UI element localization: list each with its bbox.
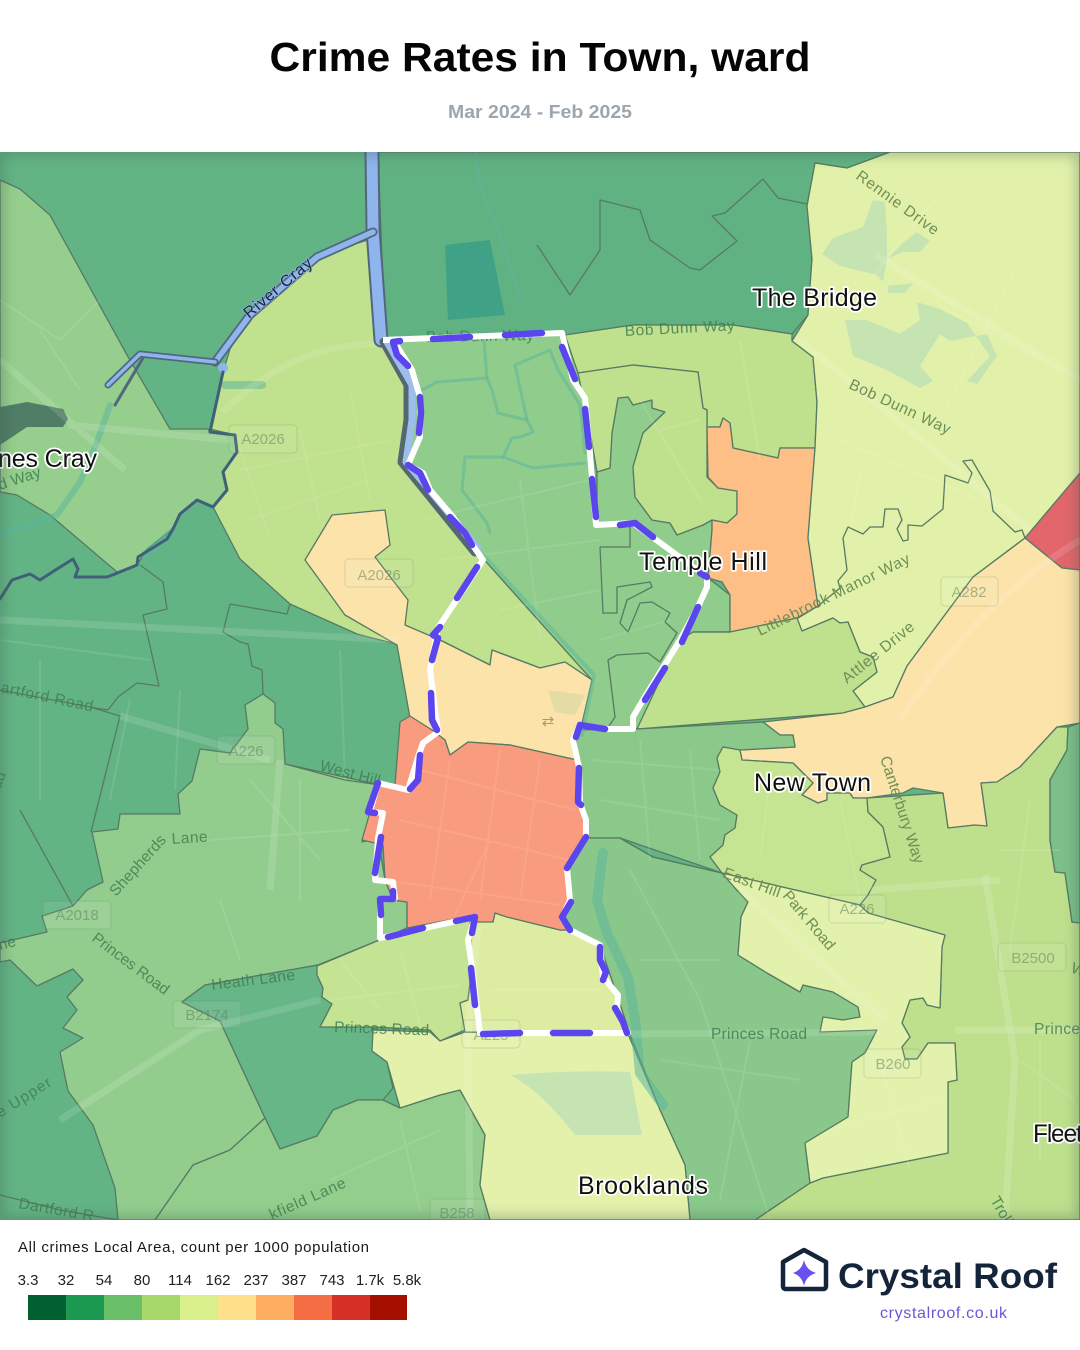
place labels: Temple Hill xyxy=(639,548,767,576)
map xyxy=(0,150,1080,1228)
road labels: Attlee Drive xyxy=(839,619,918,687)
park: teal rectangle xyxy=(445,240,505,320)
logo URL: crystalroof.co.uk xyxy=(880,1305,1008,1322)
area: A2026 light green xyxy=(210,240,592,680)
area: Temple Hill crescent xyxy=(597,397,712,578)
place labels xyxy=(0,284,1080,1200)
road labels: Lane xyxy=(171,829,208,848)
legend colour scale xyxy=(28,1295,407,1320)
lakes xyxy=(510,200,997,1135)
legend value labels: 387 xyxy=(281,1272,307,1289)
railway station symbol: ⇄ xyxy=(542,713,554,730)
road number badges: A2018 xyxy=(55,907,99,924)
place labels: The Bridge xyxy=(752,284,877,312)
area: far east green xyxy=(1050,723,1080,923)
area: orange ward xyxy=(707,418,818,632)
icon: house with star xyxy=(783,1250,826,1289)
area: ward circle light green xyxy=(578,365,737,535)
legend value labels: 5.8k xyxy=(393,1272,422,1289)
legend value labels: 1.7k xyxy=(356,1272,385,1289)
area: green south of lime xyxy=(575,722,795,873)
legend title: All crimes Local Area, count per 1000 population xyxy=(18,1239,369,1256)
road labels: Rennie Drive xyxy=(853,167,942,239)
legend value labels: 743 xyxy=(319,1272,345,1289)
road labels: Prince xyxy=(1034,1021,1080,1038)
road number badges: A226 xyxy=(839,901,875,918)
road number badges: A225 xyxy=(473,1027,509,1044)
logo wordmark: Crystal Roof xyxy=(838,1257,1057,1296)
choropleth wards xyxy=(0,152,1080,1220)
road number badges: B2174 xyxy=(185,1007,229,1024)
area: Temple Hill ward interior xyxy=(385,335,730,730)
area: north dark green xyxy=(378,152,890,340)
legend value labels: 162 xyxy=(205,1272,231,1289)
road number badges: A282 xyxy=(951,584,987,601)
road network xyxy=(0,180,1080,1220)
legend value labels: 54 xyxy=(96,1272,112,1289)
road labels: Troll xyxy=(987,1194,1016,1228)
place labels: nes Cray xyxy=(0,445,98,473)
area: ward south yellow xyxy=(460,913,630,1034)
road label: River Cray: River Cray xyxy=(241,255,316,322)
place labels: Brooklands xyxy=(578,1172,708,1200)
road labels: kfield Lane xyxy=(267,1175,349,1224)
sub-area outlines xyxy=(0,179,1025,1220)
road labels: Bob Dunn Way xyxy=(624,317,735,340)
logo: Crystal Roof xyxy=(783,1250,1057,1322)
area: Heath Lane dark green xyxy=(182,965,393,1149)
road labels xyxy=(0,167,1080,1228)
legend value labels xyxy=(18,1272,422,1289)
teal watercourses xyxy=(0,152,663,1105)
road labels: Bob Dunn Way xyxy=(846,376,953,438)
river: main channel xyxy=(0,152,594,735)
road number badges: B258 xyxy=(439,1205,475,1222)
road labels: West Hill xyxy=(318,757,382,790)
park: station patch xyxy=(548,690,585,715)
road labels: Dartford R xyxy=(17,1195,95,1225)
area: south-east central green xyxy=(562,838,877,1220)
road labels: Heath Lane xyxy=(210,967,296,994)
dark grey-green land patch xyxy=(0,402,68,445)
area: town centre salmon ward xyxy=(362,716,585,930)
area: west medium green xyxy=(0,694,407,1220)
road labels: Princes Road xyxy=(711,1026,807,1043)
title: Crime Rates in Town, ward xyxy=(270,34,810,80)
ward boundary: purple dashes xyxy=(368,333,707,1034)
legend value labels: 237 xyxy=(243,1272,269,1289)
legend xyxy=(18,1239,422,1320)
road labels: Park Road xyxy=(779,888,838,954)
subtitle: date range: Mar 2024 - Feb 2025 xyxy=(448,102,632,122)
area: Brooklands yellow xyxy=(372,1030,690,1220)
road number badges: A2026 xyxy=(357,567,401,584)
road labels: Canterbury Way xyxy=(876,754,927,866)
road labels: Princes Road xyxy=(89,930,172,999)
road number badges: B260 xyxy=(875,1056,911,1073)
area: south medium green xyxy=(155,1090,490,1220)
map base: low crime dark green areas xyxy=(0,152,1080,1220)
road number badges xyxy=(43,425,1066,1225)
road number badges: A2026 xyxy=(241,431,285,448)
ward boundary: white base line xyxy=(370,333,707,1033)
road labels: Shepherds xyxy=(106,832,170,900)
road labels: Princes Road xyxy=(334,1019,429,1039)
area: north-east yellow-green xyxy=(792,152,1080,707)
area: cream central xyxy=(305,510,592,760)
road labels: Littlebrook Manor Way xyxy=(754,551,913,640)
area: north-east of ward light green xyxy=(565,325,817,458)
legend value labels: 80 xyxy=(134,1272,150,1289)
road labels: artford Road xyxy=(0,679,95,715)
legend value labels: 3.3 xyxy=(18,1272,38,1289)
area: north-west medium green xyxy=(0,180,237,572)
legend value labels: 114 xyxy=(168,1272,192,1289)
area: East Hill yellow xyxy=(722,873,957,1183)
road number badges: A226 xyxy=(228,743,264,760)
area: New Town lime xyxy=(710,747,890,905)
road labels: Bob Dunn Way xyxy=(426,327,534,346)
place labels: New Town xyxy=(754,769,871,797)
road labels: East Hill xyxy=(721,865,783,901)
area: cream east xyxy=(740,538,1080,828)
legend value labels: 32 xyxy=(58,1272,74,1289)
area: south of ward east light green xyxy=(637,618,877,729)
road number badges: B2500 xyxy=(1011,950,1055,967)
area: red ward xyxy=(1025,473,1080,570)
area: south-west lime xyxy=(317,916,472,1041)
map edge fade xyxy=(0,150,1080,1222)
area: east green xyxy=(755,727,1080,1220)
